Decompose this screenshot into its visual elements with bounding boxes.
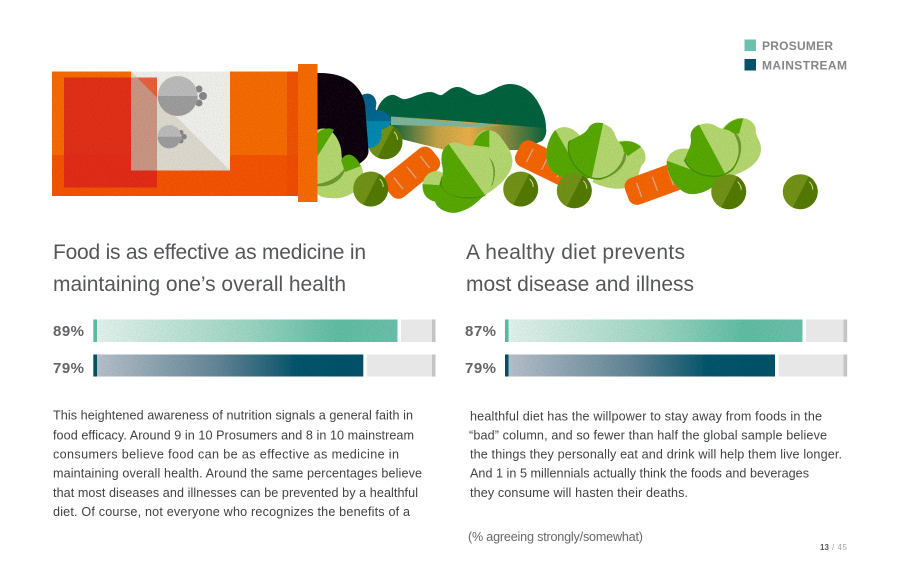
bar: mainstream 79% — [465, 354, 847, 377]
icon: small pill — [158, 125, 187, 148]
page number: 13 — [820, 543, 830, 552]
icon: pea 1 — [353, 172, 388, 206]
bar: prosumer 89% — [53, 320, 436, 342]
body text: right column: And 1 in 5 millennials actually think the foods and beverages — [470, 466, 809, 480]
bar chart: right — [465, 320, 847, 377]
icon: black leaf — [317, 73, 369, 172]
icon: large pill — [158, 76, 207, 116]
icon: dark green kale — [377, 84, 546, 150]
body text: right column: healthful diet has the willpower to stay away from foods in the — [470, 410, 822, 424]
icon: lettuce left — [317, 128, 363, 198]
icon: lettuce middle right — [534, 97, 655, 216]
bar: prosumer 89%: 89% — [53, 323, 84, 340]
illustration: pill bottle spilling vegetables — [52, 64, 818, 216]
body text: right column: the things they personally eat and drink will help them live longer. — [470, 448, 842, 462]
icon: pea 2 — [503, 172, 538, 206]
body text: left column: that most diseases and illnesses can be prevented by a healthful — [53, 486, 418, 500]
body text: left column — [53, 408, 422, 519]
icon: lettuce right — [667, 118, 761, 194]
icon: pea 3 — [557, 173, 592, 208]
heading: left — [53, 241, 366, 296]
body text: left column: maintaining overall health. Around the same percentages believe — [53, 466, 422, 480]
bar: mainstream 79%: 79% — [53, 360, 84, 377]
body text: right column — [469, 410, 842, 500]
legend: prosumer: PROSUMER — [762, 39, 833, 53]
body text: left column: food efficacy. Around 9 in 10 Prosumers and 8 in 10 mainstream — [53, 428, 414, 442]
heading: right: A healthy diet prevents — [466, 241, 685, 264]
legend — [744, 39, 847, 72]
footnote: (% agreeing strongly/somewhat) — [468, 530, 643, 544]
legend: mainstream: MAINSTREAM — [762, 58, 847, 72]
heading: right: most disease and illness — [466, 273, 694, 296]
icon: bottle label with pills — [131, 72, 230, 170]
body text: left column: This heightened awareness of nutrition signals a general faith in — [53, 408, 413, 422]
body text: left column: diet. Of course, not everyone who recognizes the benefits of a — [53, 505, 410, 519]
icon: pea 4 — [711, 174, 746, 209]
icon: bottle body — [52, 72, 298, 196]
icon: blue leaf — [362, 94, 391, 148]
bar: mainstream 79% — [53, 354, 436, 377]
body text: left column: consumers believe food can be as effective as medicine in — [53, 448, 399, 462]
icon: lettuce center — [423, 130, 512, 213]
body text: right column: “bad” column, and so fewer than half the global sample believe — [469, 428, 827, 442]
page number — [820, 543, 848, 552]
icon: translucent red label — [64, 72, 157, 188]
heading: right — [466, 241, 694, 296]
heading: left: Food is as effective as medicine in — [53, 241, 366, 264]
bar: prosumer 87%: 87% — [465, 323, 496, 340]
bar: mainstream 79%: 79% — [465, 360, 496, 377]
bar chart: left — [53, 320, 436, 377]
icon: pea behind blue leaf — [368, 124, 402, 159]
icon: pea 5 — [783, 174, 818, 209]
icon: carrot 2 — [512, 137, 578, 189]
icon: bottle cap — [298, 64, 318, 202]
body text: right column: they consume will hasten their deaths. — [470, 486, 688, 500]
icon: carrot 3 — [622, 161, 688, 207]
page number: / 45 — [832, 543, 848, 552]
icon: carrot 1 — [380, 143, 444, 202]
bar: prosumer 87% — [465, 320, 847, 342]
heading: left: maintaining one’s overall health — [53, 273, 346, 296]
